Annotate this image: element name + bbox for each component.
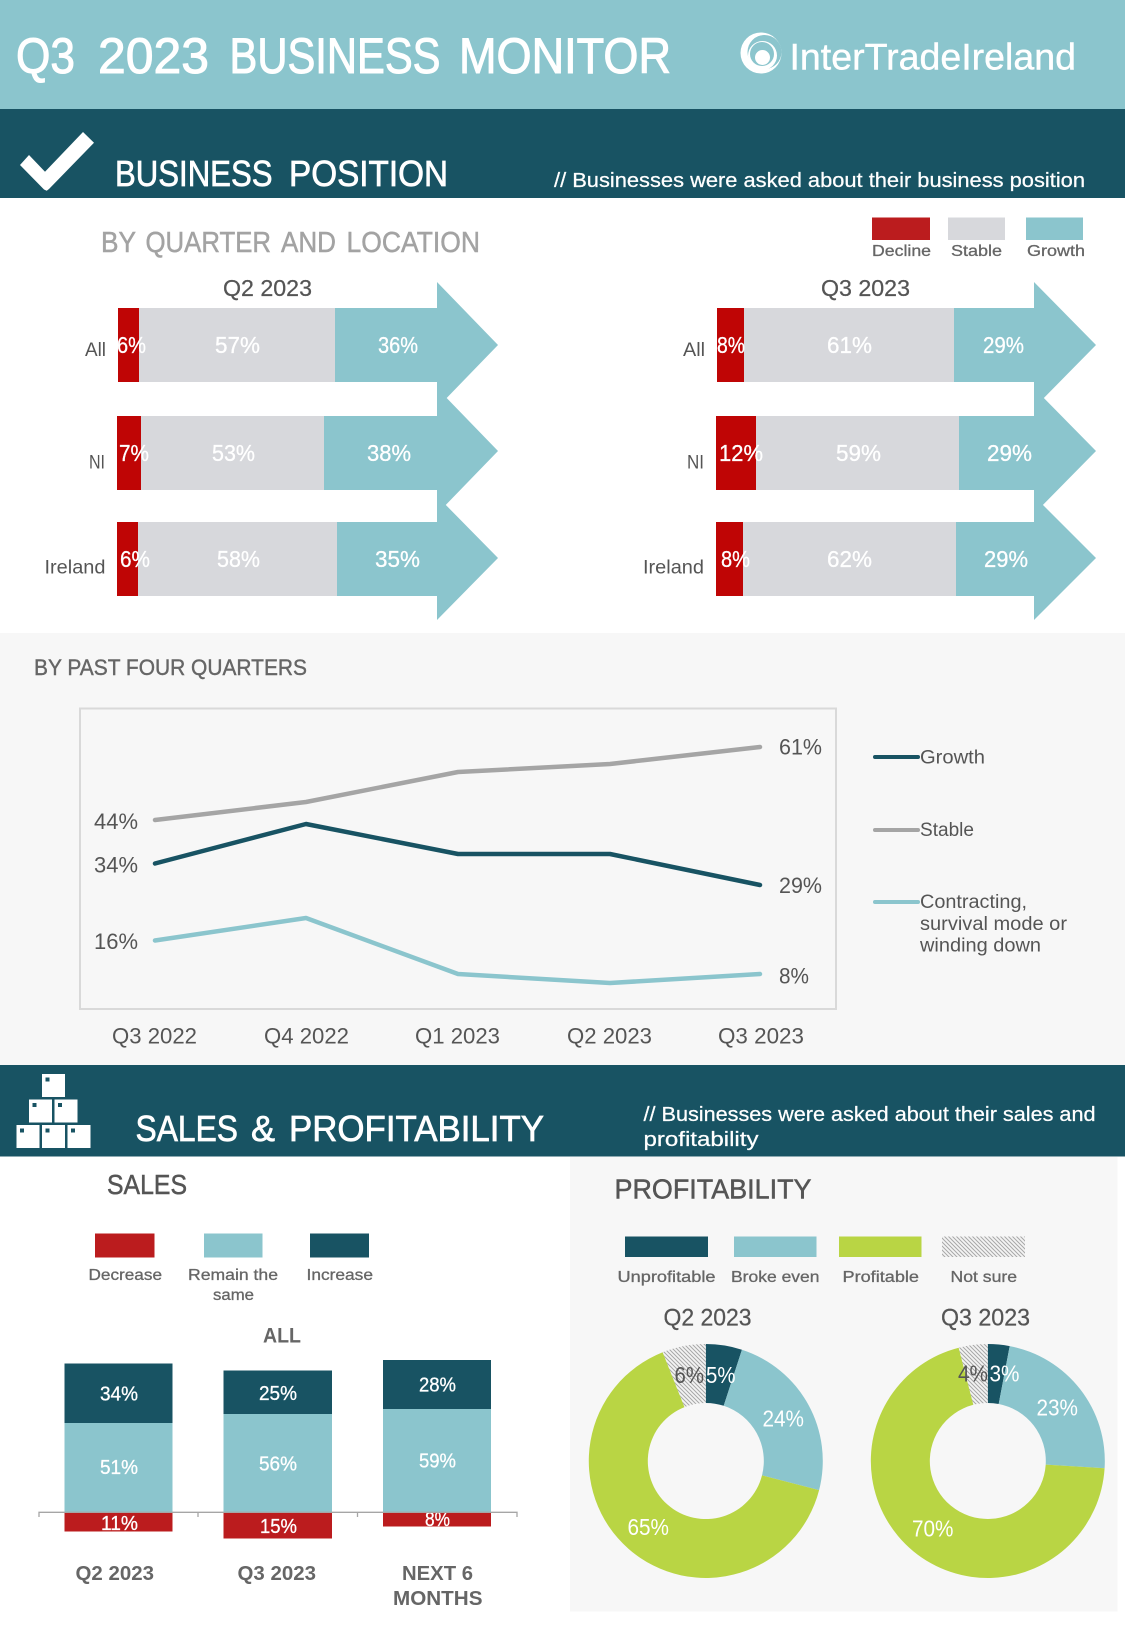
axis labels: Q2 2023 — [76, 1563, 154, 1585]
title: Q3 — [16, 28, 75, 84]
bar row: NI Q3: 59% — [836, 440, 881, 466]
section banner: sales and profitability — [0, 1065, 1125, 1156]
subtitle: business position: // Businesses were asked about their business position — [554, 169, 1085, 192]
donut chart: Q2 2023: Q2 2023 — [664, 1304, 752, 1332]
subtitle: sales and profitability — [644, 1103, 1096, 1151]
line chart legend: Contracting, — [920, 892, 1027, 913]
stacked bar chart: sales: ALL — [263, 1324, 301, 1348]
panel: past four quarters — [0, 633, 1125, 1065]
line chart: Q1 2023 — [415, 1024, 500, 1048]
stacked bar: next 6 months — [383, 1360, 491, 1531]
line chart: Q4 2022 — [264, 1024, 349, 1048]
heading: by past four quarters: BY PAST FOUR QUARTERS — [34, 655, 307, 680]
stacked bar: Q3 2023: 56% — [259, 1454, 297, 1476]
bar row: All Q3: All — [683, 340, 705, 361]
axis labels — [76, 1563, 482, 1610]
bar row: NI Q2: 53% — [212, 440, 255, 466]
legend: profitability: Not sure — [950, 1269, 1017, 1286]
line chart legend: winding down — [919, 936, 1041, 956]
bar row: Ireland Q3 — [643, 496, 1096, 620]
bar row: NI Q2: 7% — [119, 440, 149, 466]
heading: sales: SALES — [107, 1169, 187, 1200]
line chart: 29% — [779, 873, 822, 898]
panel: sales — [39, 1169, 517, 1610]
title: BUSINESS — [230, 28, 440, 84]
donut chart: Q3 2023: 70% — [912, 1516, 954, 1542]
axis labels: NEXT 6 — [402, 1563, 473, 1585]
axis labels: MONTHS — [393, 1588, 482, 1610]
heading: sales and profitability — [136, 1108, 544, 1149]
donut chart: Q2 2023: 6% — [674, 1362, 704, 1388]
donut chart: Q2 2023 — [589, 1304, 823, 1578]
heading: sales and profitability: & — [251, 1108, 275, 1149]
stacked bar: Q3 2023 — [224, 1370, 332, 1538]
heading: profitability: PROFITABILITY — [614, 1174, 812, 1204]
legend: decline stable growth: Growth — [1027, 243, 1085, 260]
heading: sales and profitability: PROFITABILITY — [289, 1108, 544, 1149]
donut chart: Q3 2023: 23% — [1036, 1394, 1078, 1420]
bar row: All Q2: 36% — [378, 332, 418, 358]
title: 2023 — [98, 28, 209, 84]
legend: decline stable growth — [872, 218, 1085, 260]
title — [16, 28, 671, 84]
bar row: Ireland Q2: 58% — [217, 546, 260, 572]
bar row: NI Q2: 38% — [367, 440, 411, 466]
heading: business position: BUSINESS — [115, 153, 272, 194]
line chart — [80, 708, 836, 1048]
legend: profitability — [618, 1236, 1025, 1286]
line chart: Q2 2023 — [567, 1024, 652, 1048]
bar row: All Q2: 6% — [117, 332, 146, 358]
bar row: All Q3: 29% — [983, 332, 1024, 358]
icon: check mark — [20, 132, 94, 191]
line chart: 44% — [94, 809, 138, 834]
panel: profitability — [570, 1157, 1118, 1612]
bar row: All Q3: 8% — [717, 332, 745, 358]
stacked bar: Q2 2023: 11% — [101, 1513, 138, 1535]
heading: by quarter and location: LOCATION — [346, 227, 480, 259]
subtitle: sales and profitability: // Businesses were asked about their sales and — [644, 1103, 1096, 1126]
bar row: All Q2: 57% — [215, 332, 260, 358]
bar row: Ireland Q2: 6% — [120, 546, 150, 572]
heading: sales and profitability: SALES — [136, 1108, 238, 1149]
line chart legend: Stable — [920, 820, 974, 841]
donut chart: Q2 2023: 5% — [706, 1362, 736, 1388]
bar row: All Q3 — [683, 282, 1096, 408]
line chart legend — [875, 748, 1068, 956]
line chart: Q3 2023 — [718, 1024, 804, 1048]
legend: profitability: Profitable — [842, 1269, 919, 1286]
bar row: All Q2 — [85, 282, 498, 408]
stacked bar: next 6 months: 28% — [419, 1374, 456, 1396]
section banner: business position — [0, 109, 1125, 198]
bar row: NI Q3 — [687, 388, 1096, 514]
bar row: Ireland Q2: 35% — [375, 546, 420, 572]
donut chart: Q3 2023: 4% — [958, 1360, 988, 1386]
donut chart: Q3 2023 — [871, 1304, 1105, 1578]
donut chart: Q3 2023: Q3 2023 — [941, 1304, 1030, 1332]
heading: by quarter and location: AND — [281, 227, 336, 259]
legend: sales — [88, 1234, 373, 1304]
legend: decline stable growth: Stable — [951, 243, 1002, 260]
legend: sales: Decrease — [88, 1267, 162, 1284]
legend: profitability: Broke even — [731, 1269, 820, 1286]
bar row: Ireland Q2: Ireland — [44, 558, 106, 578]
title: MONITOR — [459, 28, 671, 84]
axis — [39, 1512, 517, 1517]
chart: Q2 2023 arrow bars — [44, 275, 498, 620]
legend: decline stable growth: Decline — [872, 243, 931, 260]
stacked bar: Q2 2023: 51% — [100, 1457, 138, 1479]
line chart legend: Growth — [920, 748, 985, 768]
legend: sales: same — [213, 1287, 254, 1304]
line chart legend: survival mode or — [920, 914, 1068, 935]
stacked bar: Q3 2023: 25% — [259, 1383, 297, 1405]
icon: stacked boxes — [16, 1074, 90, 1148]
line chart: 34% — [94, 852, 138, 878]
stacked bar: Q2 2023: 34% — [100, 1384, 138, 1406]
heading: by quarter and location: QUARTER — [146, 227, 271, 259]
donut chart: Q3 2023: 3% — [990, 1360, 1020, 1386]
stacked bar chart: sales — [39, 1324, 517, 1610]
stacked bar: next 6 months: 8% — [425, 1509, 450, 1531]
line chart: 16% — [94, 929, 138, 954]
bar row: Ireland Q3: 29% — [984, 546, 1028, 572]
bar row: Ireland Q3: 62% — [827, 546, 872, 572]
bar row: Ireland Q2 — [44, 496, 498, 620]
bar row: NI Q3: 29% — [987, 440, 1032, 466]
stacked bar: next 6 months: 59% — [419, 1450, 456, 1472]
chart title: Q2 2023: Q2 2023 — [223, 275, 312, 301]
heading: by quarter and location — [101, 227, 480, 259]
legend: sales: Remain the — [188, 1267, 278, 1284]
bar row: NI Q3: 12% — [719, 440, 763, 466]
bar row: NI Q3: NI — [687, 452, 704, 474]
heading: business position — [115, 153, 448, 194]
subtitle: sales and profitability: profitability — [644, 1128, 759, 1151]
line chart: 61% — [779, 734, 822, 760]
heading: business position: POSITION — [289, 153, 448, 194]
bar row: Ireland Q3: Ireland — [643, 558, 704, 578]
chart: Q3 2023 arrow bars — [643, 275, 1096, 620]
chart title: Q3 2023: Q3 2023 — [821, 275, 910, 301]
bar row: Ireland Q3: 8% — [721, 546, 750, 572]
bar row: All Q3: 61% — [827, 332, 872, 358]
logo: InterTradeIreland: InterTradeIreland — [790, 36, 1076, 77]
legend: profitability: Unprofitable — [618, 1269, 716, 1286]
stacked bar: Q3 2023: 15% — [260, 1516, 297, 1538]
header banner — [0, 0, 1125, 109]
line chart: Q3 2022 — [112, 1024, 197, 1048]
donut chart: Q2 2023: 24% — [762, 1406, 804, 1432]
line chart: 8% — [779, 964, 809, 988]
bar row: NI Q2: NI — [89, 452, 105, 474]
donut chart: Q2 2023: 65% — [628, 1514, 669, 1540]
bar row: NI Q2 — [89, 388, 498, 514]
heading: by quarter and location: BY — [101, 227, 136, 259]
axis labels: Q3 2023 — [238, 1563, 316, 1585]
stacked bar: Q2 2023 — [64, 1364, 172, 1535]
bar row: All Q2: All — [85, 340, 106, 361]
legend: sales: Increase — [306, 1267, 373, 1284]
